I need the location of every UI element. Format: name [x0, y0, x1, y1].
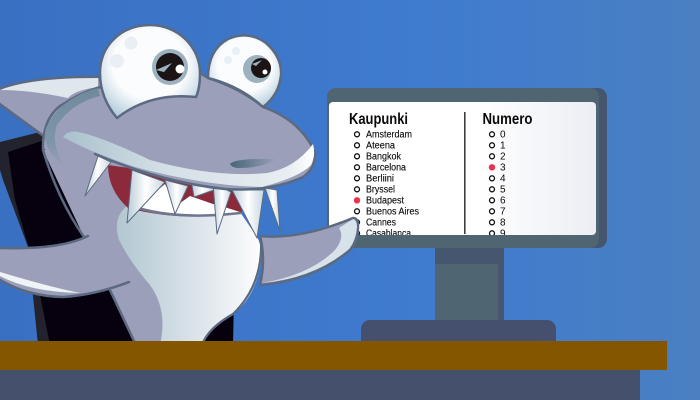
number list: 5: [500, 185, 506, 196]
right eye: [208, 35, 281, 107]
number list: 7: [500, 207, 506, 218]
left arm: [0, 225, 140, 297]
screen divider: [464, 112, 466, 234]
city radio buttons: [354, 132, 360, 236]
chair: [0, 130, 235, 345]
city list: Bryssel: [366, 185, 395, 196]
city list: Buenos Aires: [366, 207, 419, 218]
city list: Barcelona: [366, 163, 406, 174]
mouth: [85, 156, 280, 238]
number list: 2: [500, 152, 506, 163]
number list: 8: [500, 218, 506, 229]
nostril: [230, 159, 277, 168]
number list: 1: [500, 141, 506, 152]
monitor bezel: [327, 88, 607, 248]
number radio buttons: [489, 132, 495, 236]
monitor base: [361, 320, 556, 350]
number list: 4: [500, 174, 506, 185]
dorsal fin: [0, 77, 105, 137]
city list: Budapest: [366, 196, 404, 207]
shark: [0, 25, 358, 345]
city list: Casablanca: [366, 229, 411, 240]
right arm: [260, 218, 358, 285]
heading: Numero: Numero: [482, 111, 532, 128]
number list: 3: [500, 163, 506, 174]
city list: Ateena: [366, 141, 396, 152]
heading: Kaupunki: Kaupunki: [349, 111, 408, 128]
body: [43, 150, 175, 345]
belly: [117, 206, 261, 345]
head rim shading: [45, 88, 100, 168]
bezel bottom edge: [329, 235, 596, 238]
city list: Bangkok: [366, 152, 401, 163]
city list: Cannes: [366, 218, 396, 229]
monitor screen: [329, 102, 596, 235]
number list: 9: [500, 229, 506, 240]
desk front: [0, 369, 640, 400]
city list: [366, 130, 419, 240]
monitor stand: [435, 247, 504, 322]
screen content: [349, 111, 532, 240]
lip highlight: [63, 132, 314, 187]
monitor: [327, 88, 607, 350]
teeth: [85, 156, 280, 238]
lower gum and chin line: [136, 184, 240, 216]
desk top: [0, 341, 667, 370]
left eye: [100, 25, 200, 118]
number list: [500, 130, 506, 235]
city list: Berliini: [366, 174, 394, 185]
number list: 6: [500, 196, 506, 207]
city list: Amsterdam: [366, 130, 412, 141]
head: [43, 73, 315, 190]
number list: 0: [500, 130, 506, 141]
